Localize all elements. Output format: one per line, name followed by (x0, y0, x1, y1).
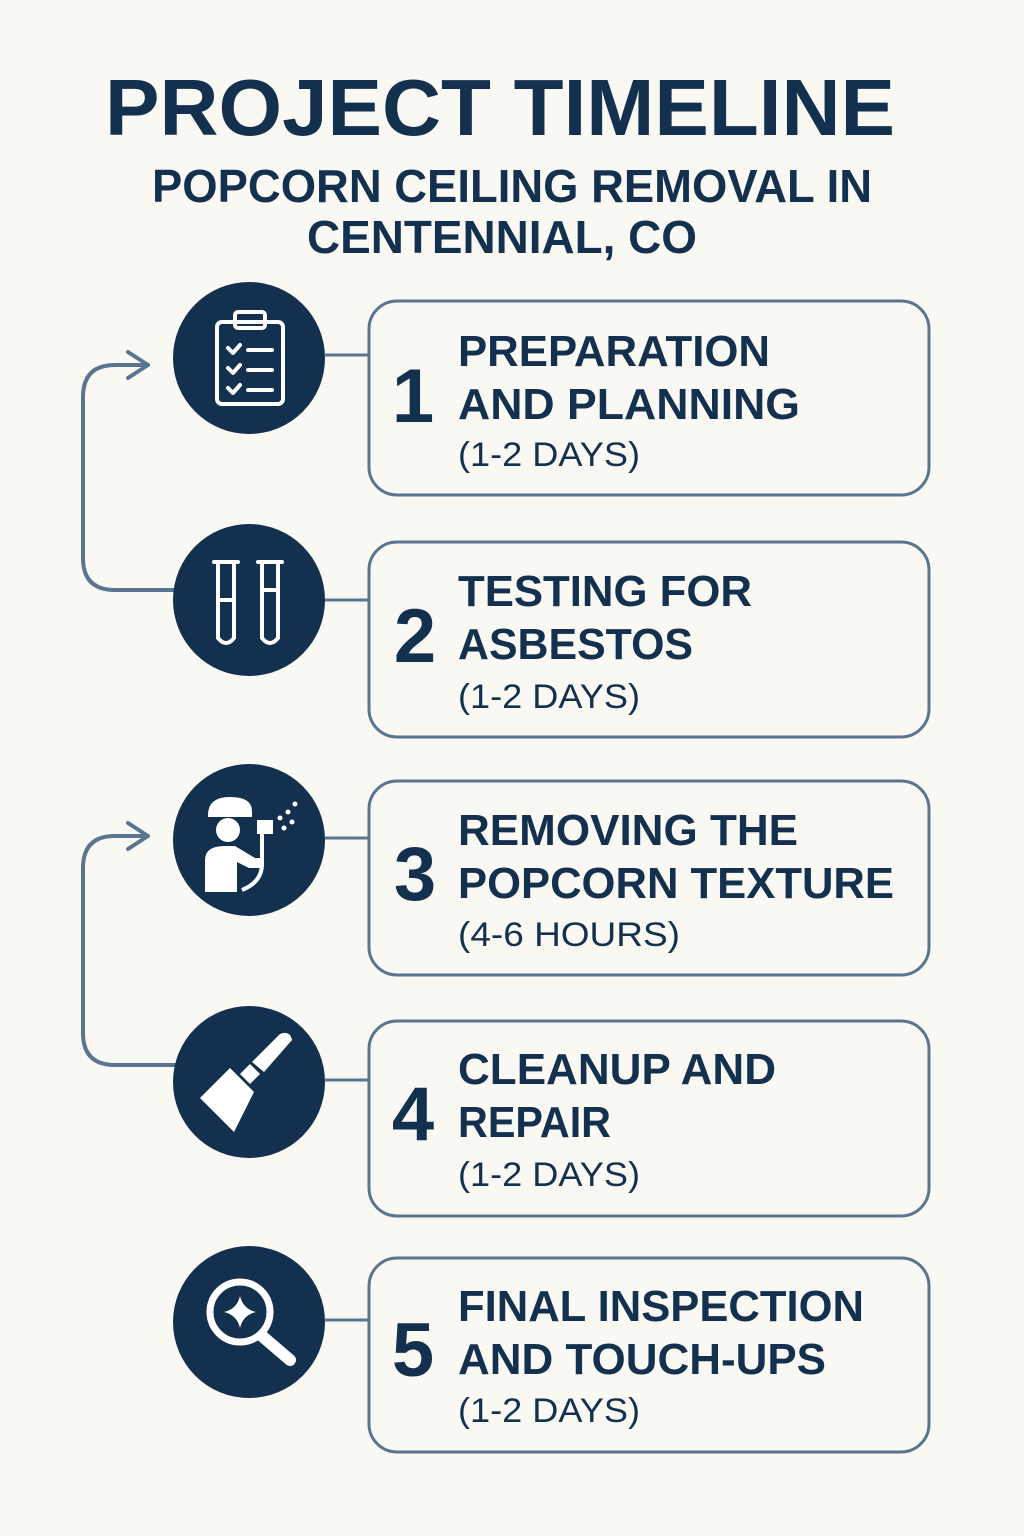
title: PROJECT TIMELINE (105, 63, 895, 152)
step 3: POPCORN TEXTURE (458, 859, 894, 908)
step 1: 1 (392, 354, 434, 439)
step 2: 2 (394, 594, 436, 679)
step 5: 5 (392, 1308, 434, 1393)
step 3: 3 (394, 832, 436, 917)
step 1: (1-2 DAYS) (458, 436, 640, 474)
arrow: 2 to 1 (83, 352, 175, 590)
step 4: (1-2 DAYS) (458, 1156, 640, 1194)
step 4: REPAIR (458, 1098, 611, 1147)
step 5: FINAL INSPECTION (458, 1282, 864, 1331)
step 2 (173, 524, 929, 737)
icon: clipboard (173, 282, 325, 434)
subtitle: POPCORN CEILING REMOVAL IN (152, 160, 872, 212)
step 5: AND TOUCH-UPS (458, 1335, 826, 1384)
step 1: PREPARATION (458, 327, 770, 376)
subtitle (152, 160, 872, 263)
subtitle: CENTENNIAL, CO (307, 211, 697, 263)
step 4: 4 (392, 1072, 434, 1157)
step 4: CLEANUP AND (458, 1045, 776, 1094)
step 2: (1-2 DAYS) (458, 678, 640, 716)
arrow: 4 to 3 (83, 823, 175, 1065)
step 5: (1-2 DAYS) (458, 1392, 640, 1430)
step 2: ASBESTOS (458, 620, 693, 669)
step 5 (173, 1246, 929, 1452)
step 1 (173, 282, 929, 495)
icon: worker spraying (173, 764, 325, 916)
step 3: REMOVING THE (458, 806, 798, 855)
icon: test tubes (173, 524, 325, 676)
step 2: TESTING FOR (458, 567, 752, 616)
step 3 (173, 764, 929, 975)
step 1: AND PLANNING (458, 380, 800, 429)
icon: magnifier (173, 1246, 325, 1398)
step 4 (173, 1006, 929, 1216)
icon: scraper (173, 1006, 325, 1158)
step 3: (4-6 HOURS) (458, 916, 680, 954)
